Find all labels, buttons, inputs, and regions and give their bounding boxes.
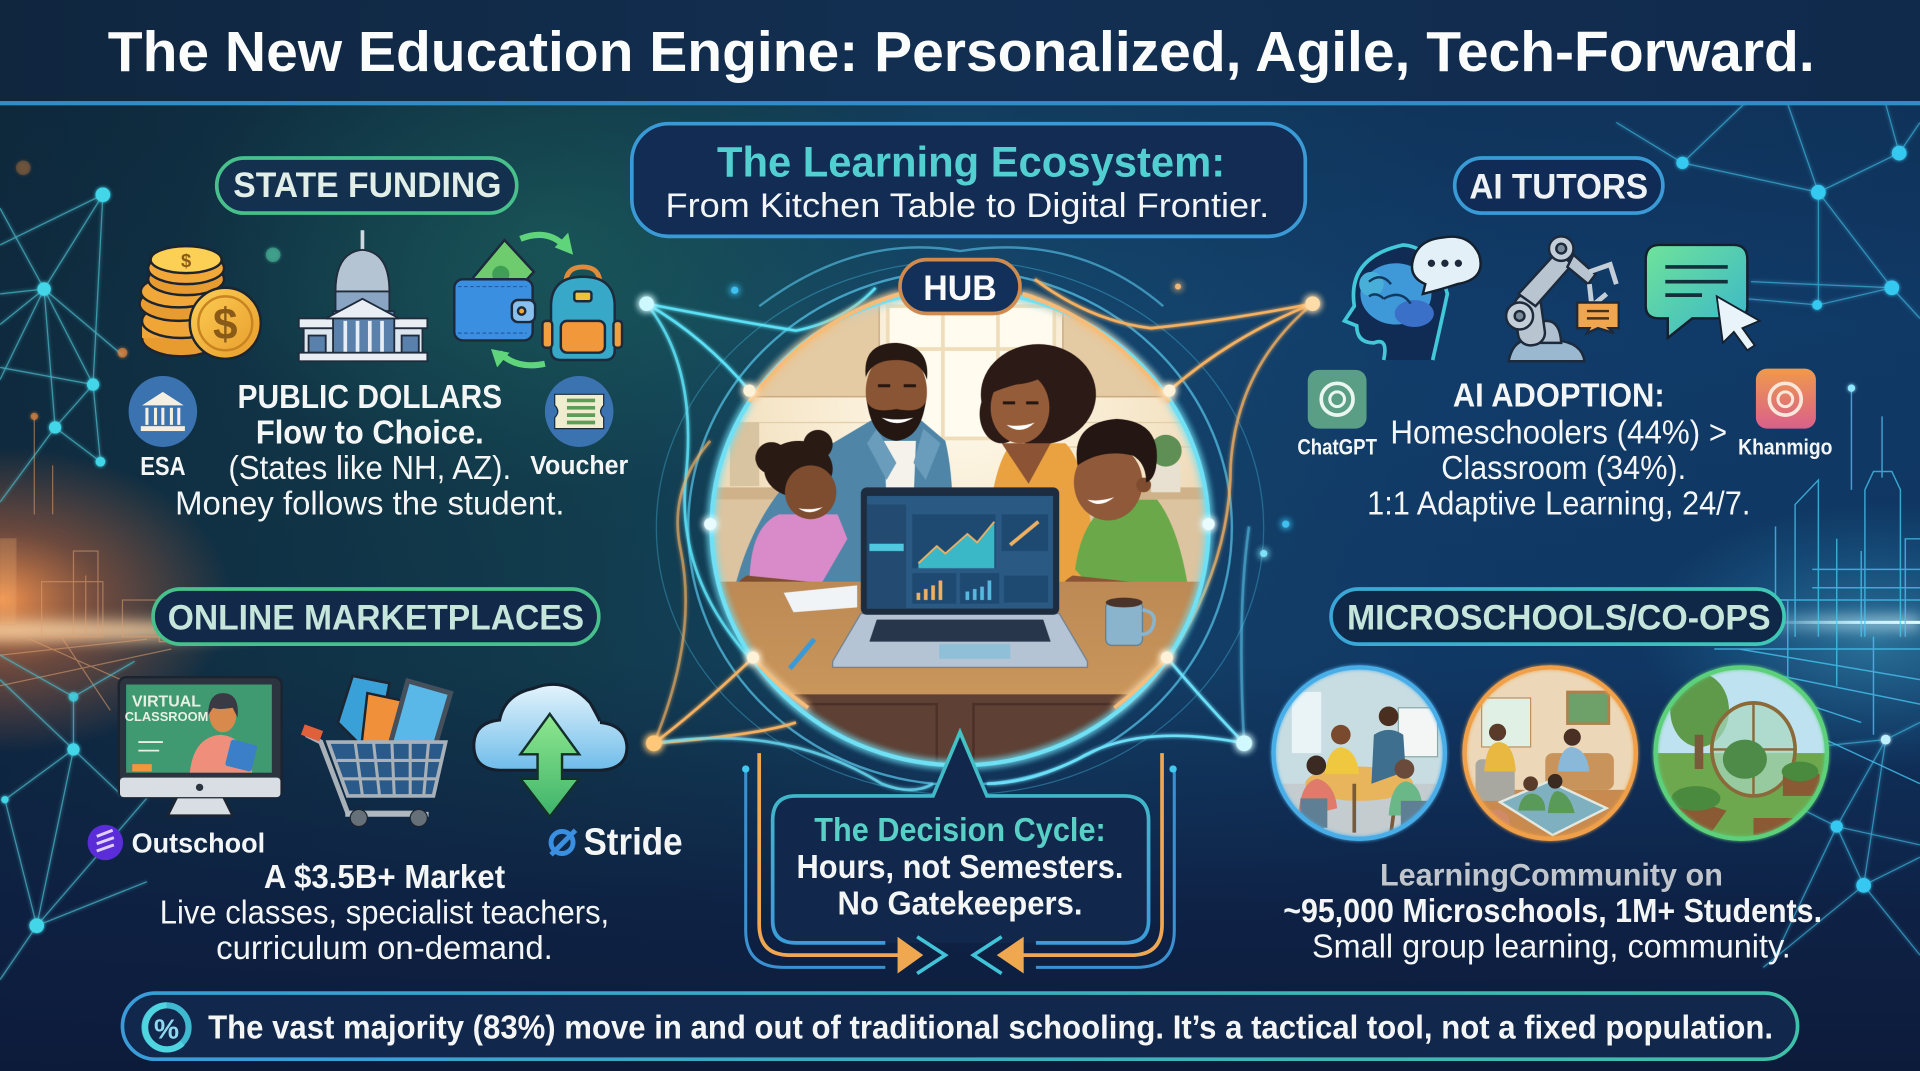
arrow: right orange cycle bbox=[973, 753, 1177, 974]
title bar bbox=[0, 0, 1920, 105]
boy bbox=[1064, 418, 1188, 582]
text block: decision cycle: The Decision Cycle: bbox=[814, 812, 1106, 849]
heading pill: microschools: MICROSCHOOLS/CO-OPS bbox=[1347, 597, 1771, 637]
label: voucher: Voucher bbox=[530, 452, 628, 480]
panel: state funding bbox=[129, 158, 628, 522]
heading pill: ai tutors bbox=[1455, 158, 1663, 213]
icon: brain with speech bubble bbox=[1344, 237, 1481, 360]
label: ESA: ESA bbox=[140, 453, 186, 481]
heading pill: ai tutors: AI TUTORS bbox=[1469, 166, 1648, 206]
right city skyline and circuit lines bbox=[1714, 388, 1920, 784]
icon: ESA badge bbox=[129, 376, 197, 447]
photo circle: classroom bbox=[1273, 667, 1445, 839]
text: 83 percent statement: The vast majority (83%) move in and out of traditional schooling. It’s a tactical tool, not a fixed population. bbox=[208, 1009, 1773, 1046]
icon: virtual classroom monitor: CLASSROOM bbox=[125, 709, 208, 724]
photo circle: garden greenhouse bbox=[1653, 667, 1831, 841]
logo: Khanmigo bbox=[1738, 369, 1832, 459]
photo circle: living room bbox=[1463, 667, 1637, 839]
panel: ai tutors bbox=[1297, 158, 1832, 522]
hub network rings and connectors bbox=[647, 247, 1313, 795]
panel: learning ecosystem heading: The Learning Ecosystem: bbox=[717, 138, 1225, 186]
heading pill: state funding bbox=[217, 158, 517, 213]
panel: decision cycle bbox=[742, 732, 1177, 974]
arrow: left orange cycle bbox=[742, 753, 945, 974]
heading pill: online marketplaces bbox=[153, 589, 599, 644]
text block: ai adoption: Homeschoolers (44%) > bbox=[1390, 414, 1727, 451]
text block: public dollars: Money follows the student. bbox=[175, 485, 564, 522]
text block: decision cycle: Hours, not Semesters. bbox=[797, 849, 1123, 886]
label: hub: HUB bbox=[923, 268, 997, 308]
text block: marketplace size bbox=[160, 859, 609, 967]
bottom banner bbox=[122, 993, 1798, 1059]
panel: microschools and co-ops bbox=[1273, 589, 1831, 966]
mother bbox=[980, 344, 1096, 588]
text block: ai adoption: AI ADOPTION: bbox=[1453, 378, 1665, 415]
text block: public dollars: Flow to Choice. bbox=[256, 414, 484, 451]
logo: Outschool bbox=[88, 825, 265, 860]
text block: public dollars: (States like NH, AZ). bbox=[228, 450, 511, 487]
table bbox=[720, 581, 1200, 763]
title: The New Education Engine: Personalized, Agile, Tech-Forward. bbox=[108, 20, 1815, 83]
icon: virtual classroom monitor bbox=[119, 677, 282, 816]
panel: learning ecosystem heading bbox=[632, 124, 1305, 236]
text block: marketplace size: A $3.5B+ Market bbox=[264, 859, 505, 896]
text block: decision cycle: No Gatekeepers. bbox=[838, 886, 1082, 923]
logo: Stride: Stride bbox=[583, 822, 683, 864]
text block: microschool stats: LearningCommunity on bbox=[1380, 856, 1723, 892]
left city skyline bbox=[0, 419, 196, 710]
heading pill: microschools bbox=[1331, 589, 1784, 644]
decision cycle callout box bbox=[773, 732, 1149, 943]
icon: wallet and backpack exchange bbox=[454, 233, 622, 367]
icon: percent ring: % bbox=[154, 1013, 179, 1044]
text block: decision cycle bbox=[797, 812, 1123, 923]
logo: ChatGPT bbox=[1297, 370, 1377, 459]
panel: online marketplaces bbox=[88, 589, 683, 967]
text block: ai adoption: 1:1 Adaptive Learning, 24/7. bbox=[1367, 485, 1750, 522]
right network graph bbox=[1616, 86, 1920, 967]
icon: cloud with sync arrow bbox=[474, 684, 627, 817]
heading pill: online marketplaces: ONLINE MARKETPLACES bbox=[168, 597, 584, 637]
text block: microschool stats bbox=[1283, 856, 1822, 966]
logo: ChatGPT: ChatGPT bbox=[1297, 434, 1377, 459]
icon: shopping cart bbox=[301, 676, 451, 827]
icon: virtual classroom monitor: VIRTUAL bbox=[132, 694, 201, 711]
text block: public dollars: PUBLIC DOLLARS bbox=[238, 379, 502, 416]
panel: learning ecosystem heading: From Kitchen Table to Digital Frontier. bbox=[666, 187, 1269, 225]
text block: public dollars bbox=[175, 379, 564, 522]
hub illustration: family at kitchen table bbox=[714, 299, 1206, 763]
icon: stack of coins: $ bbox=[181, 250, 191, 271]
laptop with dashboard bbox=[833, 487, 1087, 667]
icon: robot arm bbox=[1506, 236, 1619, 361]
logo: Khanmigo: Khanmigo bbox=[1738, 434, 1832, 459]
icon: percent ring bbox=[144, 1005, 189, 1049]
icon: stack of coins: $ bbox=[213, 300, 238, 349]
text block: ai adoption bbox=[1367, 378, 1750, 522]
hub glowing nodes bbox=[639, 284, 1320, 751]
text block: ai adoption: Classroom (34%). bbox=[1441, 450, 1686, 487]
icon: stack of coins bbox=[140, 246, 261, 359]
text block: marketplace size: curriculum on-demand. bbox=[216, 930, 553, 967]
label: hub bbox=[900, 260, 1020, 314]
text block: microschool stats: Small group learning, community. bbox=[1312, 929, 1791, 966]
text block: microschool stats: ~95,000 Microschools, 1M+ Students. bbox=[1283, 893, 1822, 930]
icon: voucher badge bbox=[545, 376, 613, 447]
logo: Outschool: Outschool bbox=[132, 827, 265, 858]
icon: capitol building bbox=[299, 230, 427, 361]
mug bbox=[1106, 598, 1154, 645]
hub glowing ring bbox=[711, 290, 1209, 765]
girl bbox=[739, 430, 848, 582]
text block: marketplace size: Live classes, specialist teachers, bbox=[160, 894, 609, 931]
kitchen cabinets and window bbox=[710, 294, 1224, 585]
father bbox=[735, 343, 953, 600]
heading pill: state funding: STATE FUNDING bbox=[233, 165, 501, 205]
icon: chat bubble with cursor bbox=[1646, 245, 1760, 350]
left network graph bbox=[0, 160, 280, 980]
